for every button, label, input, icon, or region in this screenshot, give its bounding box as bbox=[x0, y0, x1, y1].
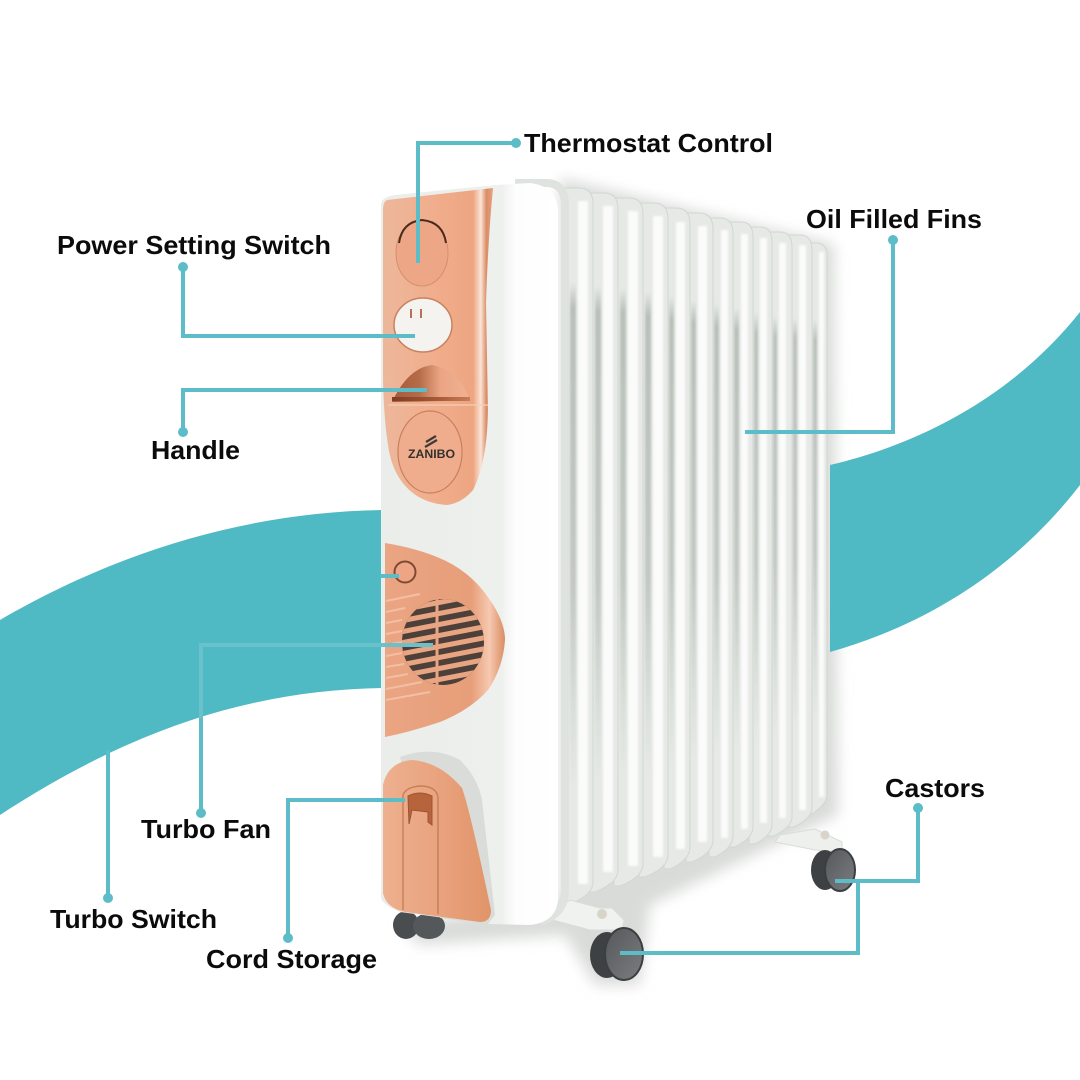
panel seam bbox=[388, 404, 488, 406]
line: oil filled fins bbox=[745, 240, 893, 432]
callout lines bbox=[108, 143, 918, 953]
left grill ribs bbox=[386, 594, 430, 700]
line: castors bbox=[620, 808, 918, 953]
label: Castors: Castors bbox=[885, 773, 985, 803]
bracket: front foot bbox=[545, 900, 624, 930]
radiator product illustration bbox=[381, 183, 855, 980]
logo badge bbox=[398, 411, 462, 493]
turbo fan copper panel bbox=[385, 543, 505, 737]
line: power setting switch bbox=[183, 267, 415, 336]
line: turbo fan bbox=[199, 718, 203, 813]
line: handle bbox=[183, 390, 427, 432]
line: cord storage bbox=[288, 800, 405, 938]
front tube frame bbox=[515, 183, 565, 922]
background wave: left bbox=[0, 510, 384, 815]
cord storage copper panel bbox=[383, 760, 491, 922]
caster: rear hidden bbox=[393, 911, 445, 939]
line: turbo fan over wave bbox=[201, 645, 433, 720]
upper copper control panel bbox=[383, 188, 493, 505]
label: Turbo Switch: Turbo Switch bbox=[50, 904, 217, 934]
fan panel shape bbox=[385, 543, 505, 737]
front panel body bbox=[381, 183, 558, 925]
line: turbo switch bbox=[108, 576, 399, 898]
label: Power Setting Switch: Power Setting Switch bbox=[57, 230, 331, 260]
background wave: right bbox=[830, 312, 1080, 652]
knob: thermostat bbox=[396, 220, 448, 286]
bracket: right foot bbox=[775, 829, 842, 852]
caster: front bbox=[590, 928, 643, 980]
turbo switch button bbox=[394, 562, 416, 582]
label: Cord Storage: Cord Storage bbox=[206, 944, 377, 974]
knob: power setting bbox=[394, 298, 452, 352]
line: thermostat control bbox=[418, 143, 516, 263]
label: Thermostat Control: Thermostat Control bbox=[524, 128, 773, 158]
label: Oil Filled Fins: Oil Filled Fins bbox=[806, 204, 982, 234]
cord panel halo bbox=[400, 752, 495, 924]
radiator shadow bbox=[400, 178, 838, 985]
caster: right bbox=[811, 849, 855, 891]
cord clip bbox=[403, 786, 438, 914]
label: Handle: Handle bbox=[151, 435, 240, 465]
panel shape bbox=[383, 188, 493, 505]
fan grill opening bbox=[402, 599, 484, 685]
fan grill bars bbox=[402, 599, 484, 685]
cord panel shape bbox=[383, 760, 491, 922]
handle recess bbox=[392, 365, 470, 402]
label: Turbo Fan: Turbo Fan bbox=[141, 814, 271, 844]
callout dots bbox=[103, 138, 923, 943]
infographic canvas bbox=[0, 133, 1080, 990]
oil filled fins bbox=[564, 188, 827, 904]
logo badge: ZANIBO bbox=[408, 449, 455, 461]
handle lip bbox=[392, 397, 470, 401]
